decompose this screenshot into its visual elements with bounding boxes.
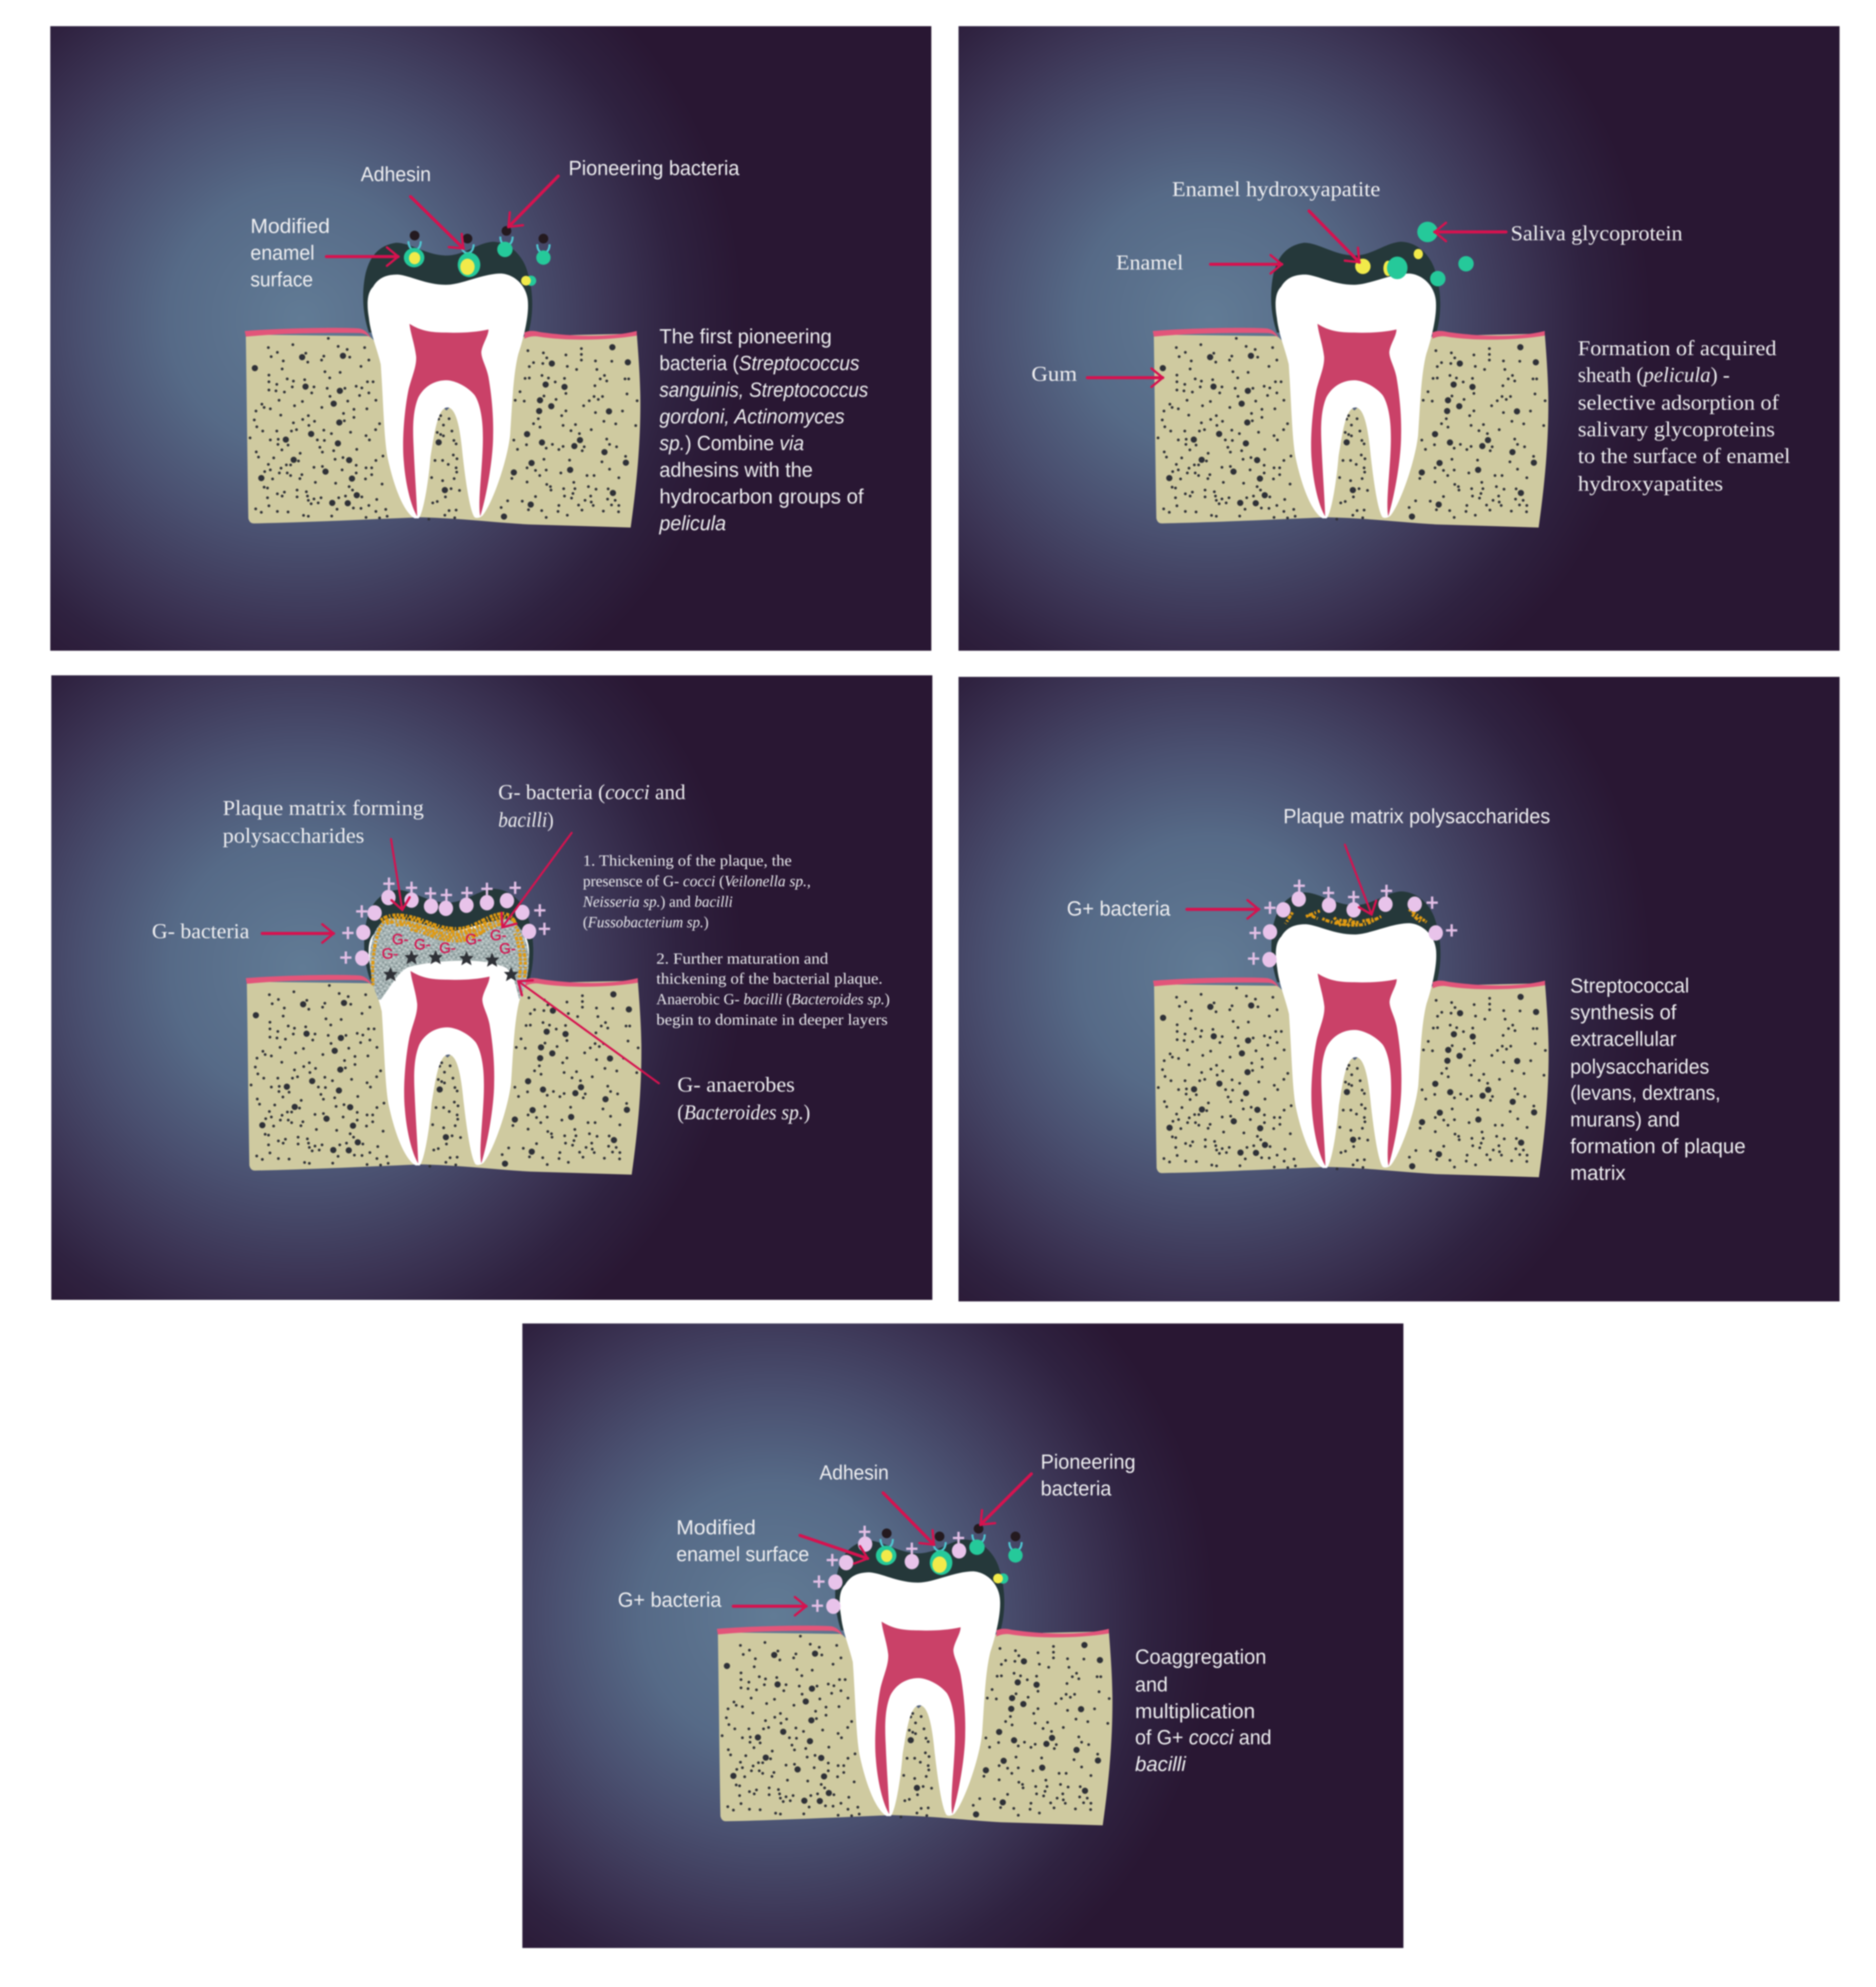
text block: coaggregation: multiplication	[1135, 1700, 1255, 1723]
label: modified enamel surface: enamel	[250, 242, 315, 264]
pioneering bacteria on enamel	[876, 1524, 1023, 1584]
G- bacteria marks	[382, 927, 516, 962]
text block: streptococcal synthesis: murans) and	[1570, 1108, 1680, 1131]
G- bacteria marks: G-	[392, 931, 408, 948]
arrow: modified enamel surface	[800, 1535, 868, 1559]
text block: coaggregation	[1135, 1646, 1272, 1776]
label: pioneering bacteria: Pioneering	[1041, 1451, 1136, 1473]
arrow: adhesin	[411, 197, 463, 248]
label: modified enamel surface	[676, 1516, 809, 1566]
plaque matrix polysaccharide specks	[1285, 909, 1426, 927]
text block: further maturation: begin to dominate in deeper layers	[656, 1010, 888, 1028]
arrow: adhesin	[883, 1493, 934, 1545]
label: gum: Gum	[1031, 362, 1077, 385]
label: adhesin: Adhesin	[819, 1462, 889, 1484]
anaerobes stars	[383, 950, 518, 981]
text block: thickening of plaque	[582, 851, 811, 931]
arrow: gum	[1087, 376, 1163, 379]
positive bacteria on plaque	[340, 878, 550, 966]
tooth cross-section in bone	[717, 1540, 1112, 1825]
label: G+ bacteria: G+ bacteria	[618, 1589, 722, 1611]
label: plaque matrix polysaccharides: Plaque matrix polysaccharides	[1283, 805, 1550, 828]
text block: further maturation: thickening of the bacterial plaque.	[656, 969, 883, 987]
text block: streptococcal synthesis: formation of plaque	[1570, 1135, 1746, 1158]
label: enamel hydroxyapatite: Enamel hydroxyapatite	[1172, 177, 1380, 201]
G- bacteria marks: G-	[382, 946, 398, 962]
text block: coaggregation: Coaggregation	[1135, 1646, 1266, 1668]
panel: extracellular polysaccharide synthesis	[959, 677, 1840, 1301]
G+ bacteria cells	[812, 1526, 966, 1614]
label: pioneering bacteria	[1041, 1451, 1136, 1500]
G- bacteria marks: G-	[439, 940, 456, 957]
text block: acquired sheath	[1578, 336, 1790, 495]
text block: further maturation: 2. Further maturation and	[656, 949, 829, 967]
text block: first pioneering bacteria: adhesins with the	[659, 459, 813, 481]
label: plaque matrix forming polysaccharides: polysaccharides	[223, 824, 364, 847]
text block: acquired sheath: to the surface of enamel	[1578, 444, 1790, 467]
text block: coaggregation: bacilli	[1135, 1753, 1186, 1776]
text block: streptococcal synthesis: synthesis of	[1570, 1001, 1677, 1024]
text block: streptococcal synthesis: Streptococcal	[1570, 975, 1689, 997]
text block: streptococcal synthesis: extracellular	[1570, 1028, 1676, 1050]
tooth cross-section in bone	[246, 889, 641, 1175]
label: enamel: Enamel	[1116, 250, 1183, 274]
arrow: modified enamel surface	[326, 255, 398, 258]
text block: coaggregation: and	[1135, 1673, 1168, 1696]
label: G- anaerobes: (Bacteroides sp.)	[677, 1100, 810, 1124]
text block: first pioneering bacteria: gordoni, Actinomyces	[659, 405, 845, 428]
arrow: enamel hydroxyapatite	[1309, 211, 1359, 262]
text block: acquired sheath: Formation of acquired	[1578, 336, 1776, 360]
text block: acquired sheath: sheath (pelicula) -	[1578, 363, 1730, 386]
label: pioneering bacteria: Pioneering bacteria	[569, 157, 740, 180]
text block: further maturation	[656, 949, 890, 1028]
tooth cross-section in bone	[1153, 891, 1549, 1177]
text block: coaggregation: of G+ cocci and	[1135, 1726, 1272, 1749]
text block: streptococcal synthesis: (levans, dextrans,	[1570, 1082, 1721, 1104]
label: G- bacteria: G- bacteria	[152, 919, 249, 943]
G- bacteria marks: G-	[414, 937, 431, 953]
label: G- bacteria cocci and bacilli: bacilli)	[498, 808, 554, 831]
label: G- anaerobes	[677, 1073, 810, 1124]
text block: thickening of plaque: 1. Thickening of the plaque, the	[583, 851, 792, 869]
arrow: plaque matrix polysaccharides	[1345, 845, 1372, 914]
text block: first pioneering bacteria	[659, 325, 868, 535]
text block: acquired sheath: hydroxyapatites	[1578, 472, 1723, 495]
text block: acquired sheath: selective adsorption of	[1578, 391, 1779, 414]
label: modified enamel surface: Modified	[250, 215, 330, 238]
text block: streptococcal synthesis: matrix	[1570, 1162, 1626, 1184]
label: G- bacteria cocci and bacilli	[498, 780, 686, 831]
G- bacteria marks: G-	[465, 931, 482, 948]
arrow: enamel	[1210, 263, 1282, 266]
text block: first pioneering bacteria: sp.) Combine via	[659, 432, 804, 455]
G+ bacteria cells	[1248, 880, 1457, 967]
arrow: plaque matrix forming polysaccharides	[391, 839, 402, 910]
text block: first pioneering bacteria: pelicula	[659, 512, 726, 535]
arrow: pioneering bacteria	[981, 1474, 1031, 1525]
label: modified enamel surface: Modified	[676, 1516, 756, 1539]
arrow: G+ bacteria	[1187, 908, 1259, 911]
arrow: G+ bacteria	[733, 1605, 806, 1608]
panel: acquired pellicle formation	[959, 26, 1840, 651]
tooth cross-section in bone	[245, 242, 640, 528]
text block: first pioneering bacteria: hydrocarbon groups of	[659, 485, 864, 508]
arrow: G- anaerobes	[518, 981, 659, 1083]
text block: streptococcal synthesis: polysaccharides	[1570, 1056, 1709, 1078]
mature plaque layer	[370, 913, 529, 1000]
tooth cross-section in bone	[1152, 242, 1549, 528]
label: pioneering bacteria: bacteria	[1041, 1477, 1112, 1500]
label: adhesin: Adhesin	[361, 163, 431, 186]
text block: first pioneering bacteria: bacteria (Streptococcus	[659, 352, 859, 375]
panel: coaggregation and multiplication	[522, 1323, 1403, 1948]
text block: first pioneering bacteria: The first pioneering	[659, 325, 832, 348]
text block: thickening of plaque: Neisseria sp.) and bacilli	[582, 892, 733, 910]
label: saliva glycoprotein: Saliva glycoprotein	[1511, 221, 1683, 245]
label: modified enamel surface	[250, 215, 330, 291]
text block: thickening of plaque: presensce of G- cocci (Veilonella sp.,	[583, 872, 811, 890]
panel: plaque thickening and maturation	[51, 675, 932, 1300]
label: plaque matrix forming polysaccharides: Plaque matrix forming	[223, 796, 424, 820]
label: G+ bacteria: G+ bacteria	[1067, 898, 1171, 920]
label: G- bacteria cocci and bacilli: G- bacteria (cocci and	[498, 780, 686, 804]
G- bacteria marks: G-	[499, 941, 516, 957]
label: modified enamel surface: surface	[250, 268, 313, 291]
label: G- anaerobes: G- anaerobes	[677, 1073, 795, 1096]
label: modified enamel surface: enamel surface	[676, 1543, 809, 1566]
panel: pioneering bacteria adhesion	[50, 26, 931, 651]
text block: first pioneering bacteria: sanguinis, Streptococcus	[659, 379, 868, 401]
G- bacteria marks: G-	[490, 927, 506, 944]
label: plaque matrix forming polysaccharides	[223, 796, 424, 847]
text block: streptococcal synthesis	[1570, 975, 1746, 1184]
bacteria on enamel	[404, 226, 551, 286]
text block: further maturation: Anaerobic G- bacilli (Bacteroides sp.)	[656, 990, 890, 1008]
salivary glycoproteins and hydroxyapatite	[1355, 222, 1474, 286]
text block: thickening of plaque: (Fussobacterium sp.)	[583, 913, 709, 931]
arrow: G- bacteria left	[262, 932, 334, 935]
arrow: saliva glycoprotein	[1435, 230, 1506, 233]
arrow: pioneering bacteria	[509, 176, 558, 227]
arrow: G- bacteria cocci and bacilli	[502, 833, 572, 927]
text block: acquired sheath: salivary glycoproteins	[1578, 417, 1775, 441]
